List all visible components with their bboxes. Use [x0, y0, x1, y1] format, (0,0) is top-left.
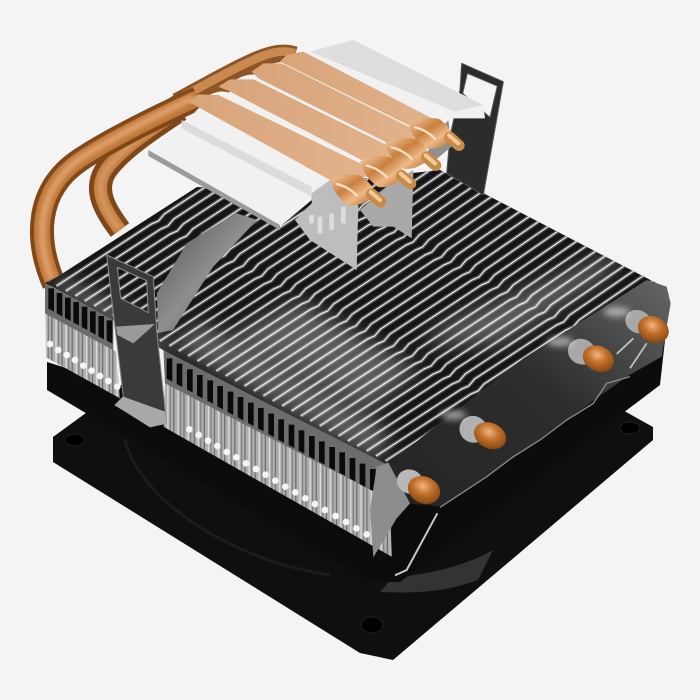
copper strip 4: [280, 52, 450, 137]
crimped pipe end 1: [330, 175, 381, 206]
block: rear step: [310, 40, 483, 112]
pipe: front loop: [42, 97, 198, 284]
crimped pipe end 3: [385, 138, 436, 169]
right side plate with fin ends: [370, 280, 673, 575]
comb: silver lower band right: [163, 383, 392, 557]
block: comb notches: [312, 207, 343, 233]
copper strip 2: [218, 79, 402, 162]
top block: aluminium base with copper strips: [148, 40, 485, 270]
heatsink: top fin surface: [45, 170, 658, 464]
heatsink: front comb side: [45, 283, 392, 557]
bracket: bright lower tab: [115, 397, 167, 427]
fins: soft highlight bands: [50, 250, 620, 465]
copper bullet tip 2: [470, 417, 510, 454]
fan: mounting hole left: [65, 434, 85, 446]
comb: white fin dots: [47, 341, 370, 538]
comb: silver lower band left: [45, 313, 120, 398]
mounting strap: angled metal band: [157, 213, 257, 333]
right bracket: dark chrome clip: [447, 63, 503, 195]
fan: lower black housing with mounting ears: [53, 407, 653, 660]
fins: repeated wavy lines: [48, 170, 654, 462]
block: white top plate: [148, 40, 485, 227]
copper strip 3: [252, 63, 432, 147]
copper strip 1: [188, 94, 370, 180]
fan: mounting hole right: [620, 422, 640, 434]
block: vertical fin plate rear: [427, 120, 452, 162]
heat pipes: curved copper tubes: [42, 52, 295, 284]
spring clip wire front: [395, 513, 437, 575]
block: plate front edge shade: [148, 150, 280, 230]
comb: dark upper band right: [163, 348, 392, 503]
fan: upper frame band: [47, 340, 665, 582]
collar: ring 2: [455, 411, 492, 447]
fan: inner ring arc: [125, 440, 330, 575]
block: upper step shade: [182, 120, 312, 197]
crimped pipe end 2: [360, 156, 411, 187]
plate: lower jagged seam: [440, 377, 630, 507]
collar: ring 3: [564, 334, 600, 369]
copper bullet tip 3: [578, 340, 618, 377]
copper bullet tip 1: [403, 471, 445, 509]
fan: grey blade arc: [380, 550, 493, 592]
left bracket: steel clip with window: [107, 255, 167, 427]
pipe: rear loop: [100, 110, 180, 230]
bracket: bright mid fold: [116, 324, 155, 343]
spring clip wire back: [617, 338, 647, 368]
comb: dark upper band left: [45, 283, 113, 352]
plate: silver corner piece: [370, 463, 410, 557]
fan: mounting hole bottom: [361, 617, 383, 633]
collar: ring 4: [621, 306, 655, 338]
crimped pipe end 4: [408, 118, 459, 149]
copper bullet tip 4: [633, 311, 673, 348]
plate: white glare near collars: [440, 307, 630, 420]
block: vertical fin plate middle: [360, 170, 413, 238]
collar: ring 1: [393, 465, 427, 498]
comb: black upper teeth: [48, 288, 376, 492]
block: vertical fin plate front: [295, 177, 358, 270]
pipe: upper runs to strips: [170, 52, 295, 110]
